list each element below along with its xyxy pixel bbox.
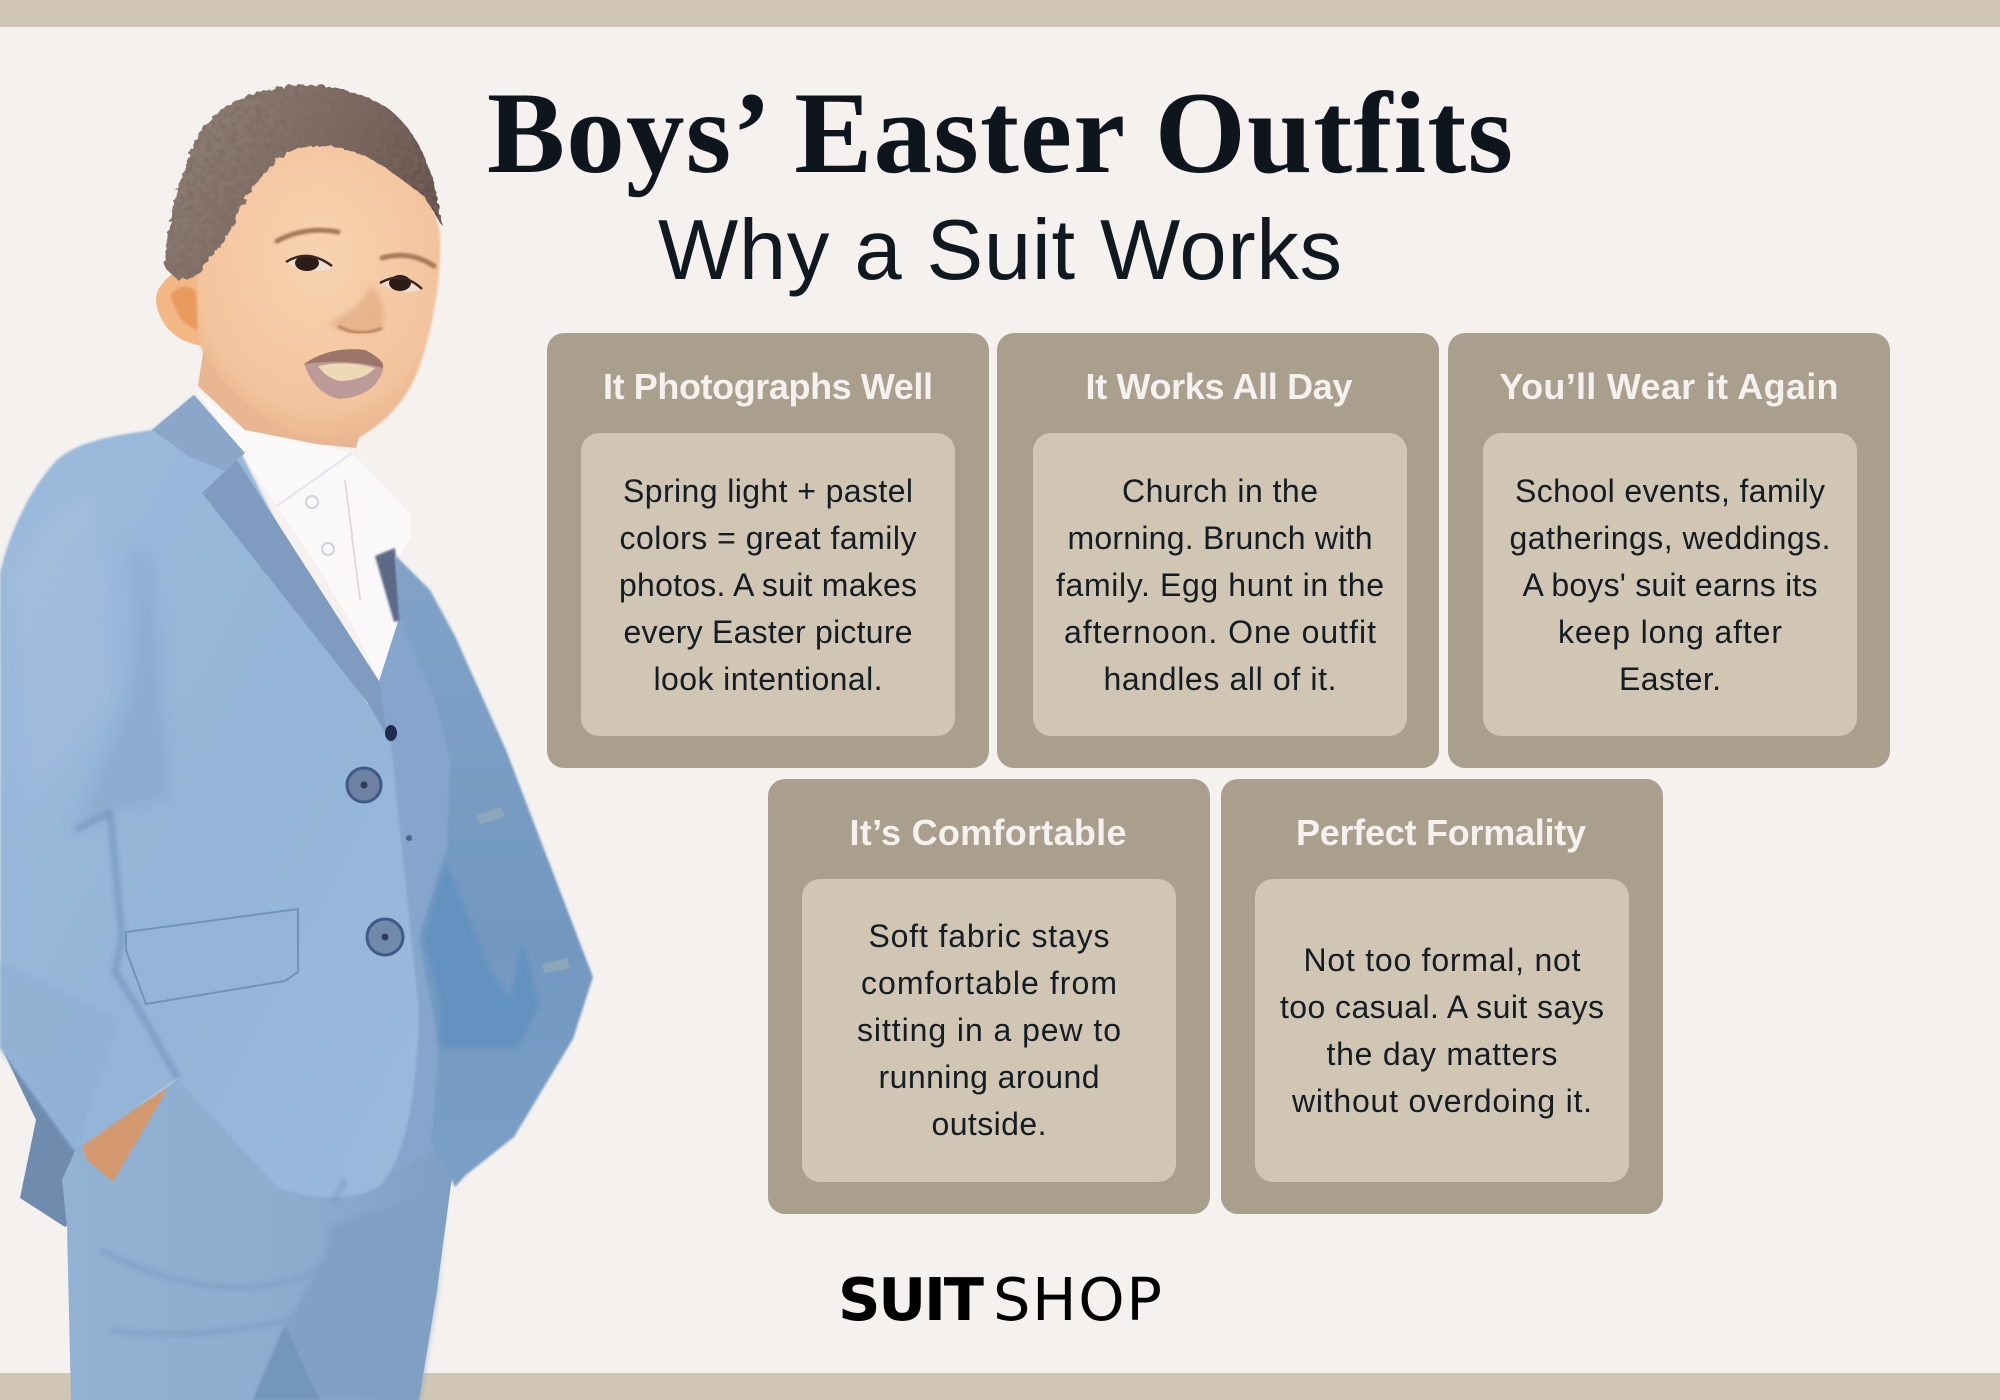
body text: every Easter picture: [624, 614, 912, 650]
right eye: [380, 275, 422, 292]
body text: Spring light + pastel: [623, 473, 913, 509]
body text: [619, 473, 917, 697]
title: Boys’ Easter Outfits: [487, 69, 1513, 198]
neck: [198, 340, 370, 448]
lower lapel: [202, 460, 387, 734]
logo: SUITSHOP: [838, 1265, 1162, 1334]
logo: SUITSHOP: SHOP: [993, 1265, 1162, 1334]
body text: too casual. A suit says: [1280, 989, 1604, 1025]
body text: without overdoing it.: [1291, 1083, 1592, 1119]
heading: It’s Comfortable: [850, 812, 1126, 853]
panel: It Works All Day: [997, 333, 1439, 768]
body text: handles all of it.: [1104, 661, 1336, 697]
body text: family. Egg hunt in the: [1056, 567, 1384, 603]
panel: You'll Wear it Again: [1448, 333, 1890, 768]
inner collar shadow: [375, 548, 402, 622]
trousers: [62, 1079, 453, 1400]
ear: [156, 269, 208, 346]
top bar: [0, 0, 2000, 27]
body text: [1280, 942, 1604, 1119]
panel: Perfect Formality: [1221, 779, 1663, 1214]
face: [198, 141, 440, 444]
jacket front and sleeve: [0, 395, 419, 1198]
body text: sitting in a pew to: [857, 1012, 1121, 1048]
sleeve highlight: [10, 490, 110, 800]
body text: the day matters: [1326, 1036, 1558, 1072]
jacket button upper: [347, 768, 381, 802]
nostril line: [338, 326, 382, 333]
vest: [340, 618, 480, 1172]
body text: [1056, 473, 1384, 697]
body text: outside.: [932, 1106, 1046, 1142]
back of jacket behind arm: [4, 1040, 130, 1227]
jacket lining: [424, 860, 540, 1048]
body text: colors = great family: [620, 520, 916, 556]
body text: morning. Brunch with: [1068, 520, 1372, 556]
logo: SUITSHOP: SUIT: [838, 1265, 984, 1334]
body text: School events, family: [1515, 473, 1825, 509]
inner leg shadow: [253, 1325, 320, 1400]
body text: Church in the: [1122, 473, 1318, 509]
shirt collar details: [277, 453, 360, 600]
body text: comfortable from: [861, 965, 1117, 1001]
nose shadow: [328, 285, 384, 332]
body text: afternoon. One outfit: [1064, 614, 1376, 650]
sleeve buttons: [477, 807, 570, 973]
lips: [304, 349, 383, 399]
photo: boy in a light blue three-piece suit: [0, 85, 593, 1400]
heading: Perfect Formality: [1296, 812, 1586, 853]
body text: Easter.: [1619, 661, 1721, 697]
hair: [165, 85, 442, 280]
body text: photos. A suit makes: [619, 567, 917, 603]
body text: A boys' suit earns its: [1522, 567, 1818, 603]
sleeve shading: [75, 540, 170, 830]
subtitle: Why a Suit Works: [658, 203, 1342, 298]
left eye: [286, 255, 332, 271]
heading: It Works All Day: [1086, 366, 1352, 407]
lower sleeve band: [0, 960, 120, 1151]
body text: Soft fabric stays: [868, 918, 1110, 954]
bottom bar: [0, 1373, 2000, 1400]
panel: It's Comfortable: [768, 779, 1210, 1214]
sleeve fold shadow: [75, 812, 178, 1079]
body text: running around: [878, 1059, 1100, 1095]
body text: gatherings, weddings.: [1510, 520, 1830, 556]
body text: Not too formal, not: [1304, 942, 1581, 978]
body text: [1510, 473, 1830, 697]
body text: look intentional.: [654, 661, 882, 697]
teeth: [318, 363, 375, 381]
jacket side hanging open: [395, 555, 593, 1187]
body text: [857, 918, 1121, 1142]
eyebrows: [277, 230, 434, 266]
heading: It Photographs Well: [603, 366, 933, 407]
hand in pocket: [80, 1088, 168, 1182]
upper lapel: [152, 395, 245, 471]
trouser crease: [100, 1180, 345, 1334]
vest buttons: [385, 725, 412, 841]
right trouser leg shadow: [253, 1190, 445, 1400]
pocket flap: [126, 909, 298, 1004]
jacket button lower: [367, 919, 403, 955]
heading: You’ll Wear it Again: [1500, 366, 1838, 407]
panel: It Photographs Well: [547, 333, 989, 768]
shirt: [194, 388, 411, 681]
body text: keep long after: [1558, 614, 1782, 650]
